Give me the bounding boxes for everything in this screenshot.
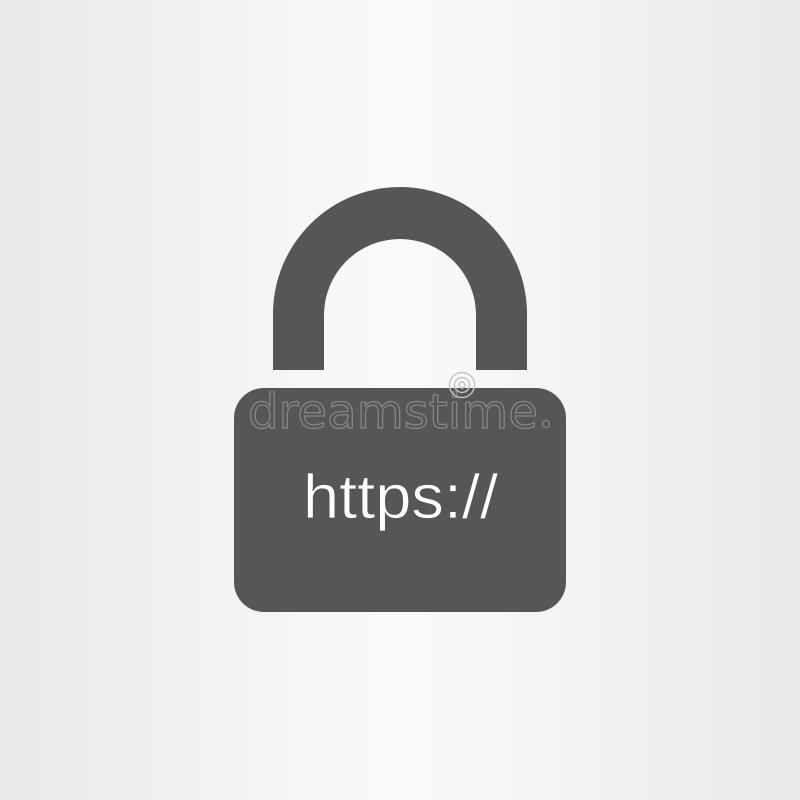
watermark spiral logo: [450, 372, 474, 398]
https label: https://: [303, 463, 499, 532]
watermark registered mark: [542, 420, 550, 428]
padlock shackle: [273, 187, 527, 370]
padlock body: [234, 388, 566, 612]
watermark: [248, 372, 550, 440]
icon: padlock: [234, 187, 566, 612]
watermark wordmark: dreamstime: [248, 385, 538, 440]
